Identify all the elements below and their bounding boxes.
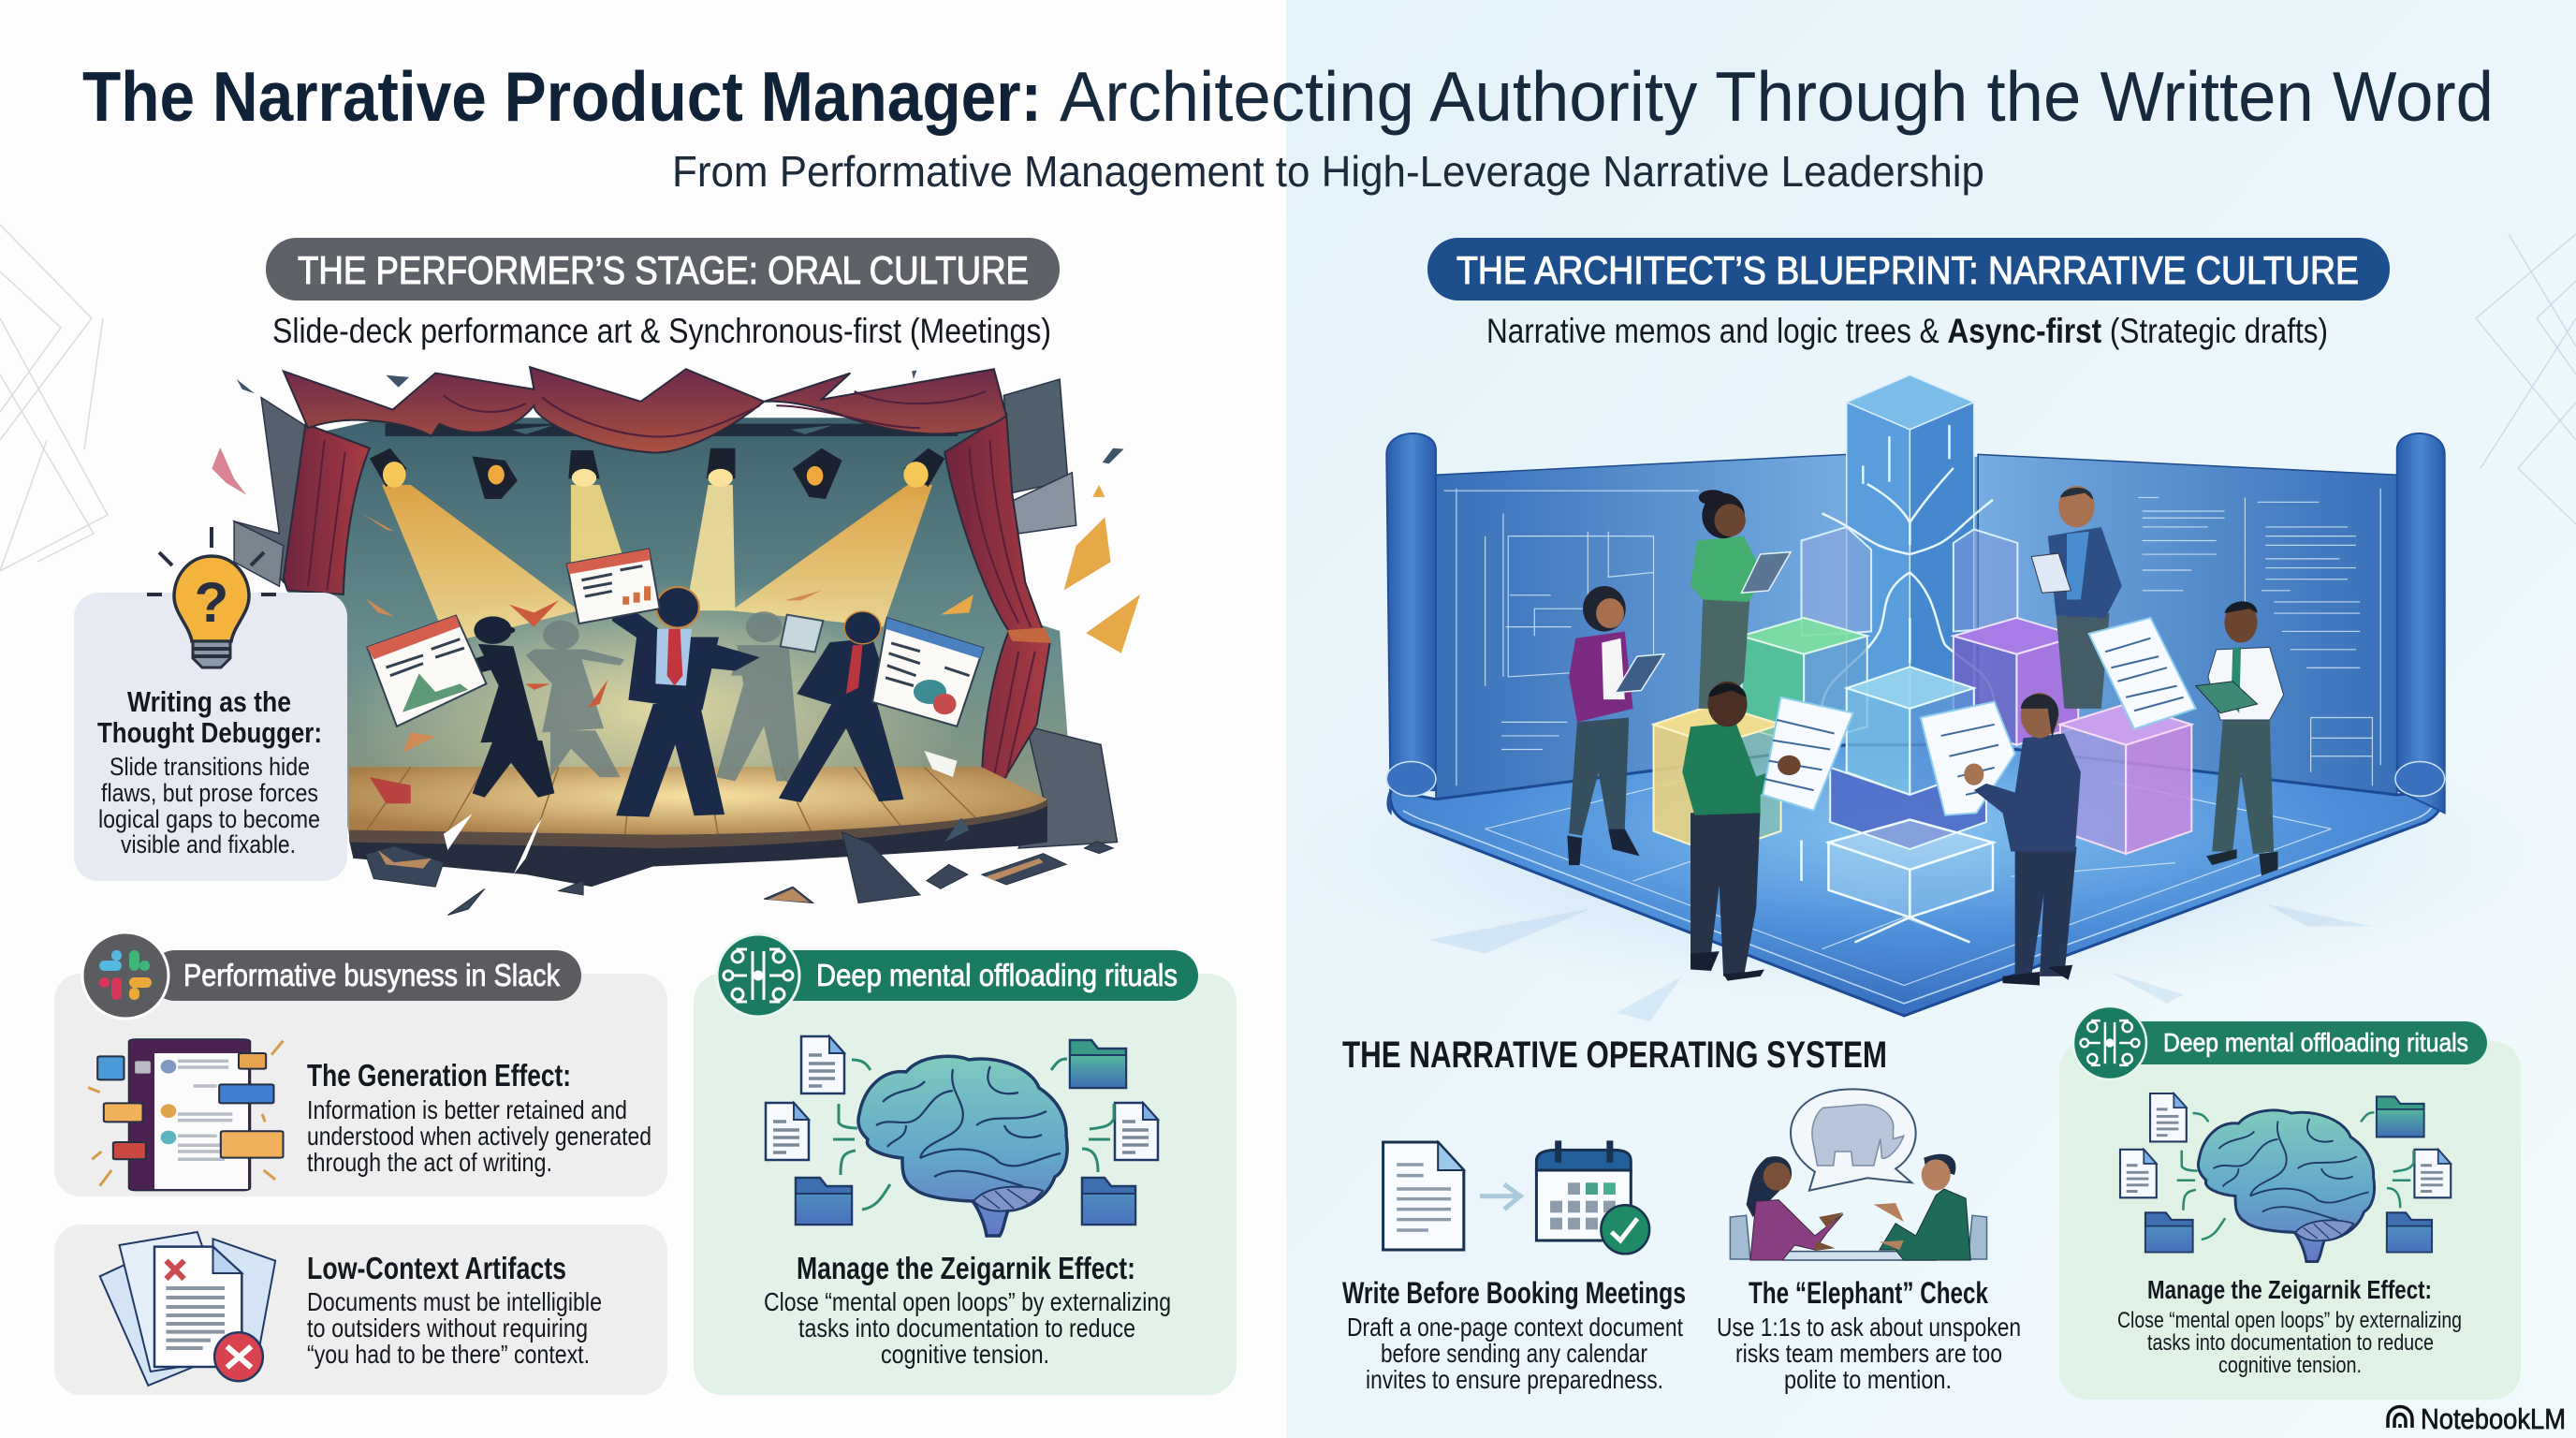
background: right panel (1286, 0, 2576, 1438)
item: write before booking meetings: Write Before Booking Meetings (1342, 1276, 1686, 1310)
panel: the generation effect: through the act of writing. (307, 1148, 552, 1177)
illustration: crumbling theatre stage (212, 367, 1140, 916)
panel: zeigarnik effect (right): Manage the Zeigarnik Effect: (2147, 1275, 2432, 1304)
right curtain (944, 414, 1051, 789)
pill: performative busyness in slack: Performative busyness in Slack (183, 958, 560, 992)
icon: question light bulb: ? (195, 571, 228, 634)
blueprint back wall right (1978, 454, 2397, 800)
floor glow behind performers (345, 579, 970, 838)
callout card (74, 593, 347, 881)
callout: writing as the thought debugger (74, 527, 347, 881)
item: the elephant check: Use 1:1s to ask about unspoken (1717, 1313, 2021, 1342)
blueprint floor (1390, 745, 2443, 1016)
panel: the generation effect: The Generation Effect: (307, 1058, 571, 1093)
callout: writing as the thought debugger: visible and fixable. (121, 830, 296, 858)
truss (386, 425, 957, 435)
pill: deep mental offloading rituals (right): Deep mental offloading rituals (2163, 1028, 2468, 1057)
title: Architecting Authority Through the Written Word (1060, 57, 2494, 136)
item: write before booking meetings: Draft a one-page context document (1347, 1313, 1683, 1342)
icon: slack logo (82, 932, 168, 1019)
blueprint back wall left (1436, 454, 1847, 800)
valance swags (284, 367, 1006, 453)
background: left panel (0, 0, 1286, 1438)
heading pill: performer's stage (266, 238, 1060, 301)
pill: deep mental offloading rituals (right) (2073, 1006, 2487, 1079)
item: the elephant check: The “Elephant” Check (1749, 1276, 1988, 1310)
translucent cube: upper right (1954, 529, 2017, 631)
left curtain (284, 424, 370, 594)
item: the elephant check: polite to mention. (1784, 1365, 1952, 1394)
light beams (382, 485, 932, 643)
callout: writing as the thought debugger: Thought Debugger: (97, 716, 322, 749)
icon: document to calendar (1383, 1140, 1649, 1254)
translucent cube: magenta (2060, 704, 2191, 854)
panel: the generation effect: understood when actively generated (307, 1122, 651, 1151)
icon: brain with documents and folders (766, 1036, 1158, 1236)
panel: zeigarnik effect (right): cognitive tension. (2218, 1353, 2362, 1378)
person: woman with green top and tablet (1690, 490, 1791, 709)
icon: question light bulb (147, 527, 276, 668)
pill: deep mental offloading rituals: Deep mental offloading rituals (816, 958, 1178, 992)
logic tree lines (1822, 425, 1995, 709)
panel: low-context artifacts (54, 1225, 667, 1395)
panel: low-context artifacts: Low-Context Artifacts (307, 1251, 566, 1285)
panel: zeigarnik effect (left): Manage the Zeigarnik Effect: (797, 1251, 1135, 1285)
translucent cube: upper left (1801, 527, 1871, 636)
person: man in green sweater, foreground (1682, 682, 1853, 981)
panel: zeigarnik effect (left): Close “mental open loops” by externalizing (764, 1287, 1171, 1316)
panel: zeigarnik effect (right): Close “mental open loops” by externalizing (2117, 1308, 2462, 1333)
item: the elephant check: risks team members are too (1735, 1339, 2002, 1368)
callout: writing as the thought debugger: logical gaps to become (98, 805, 320, 833)
item: write before booking meetings: before sending any calendar (1381, 1339, 1647, 1368)
translucent cube: yellow (1654, 704, 1781, 854)
heading pill: architect's blueprint (1427, 238, 2390, 301)
stage lights (370, 448, 944, 499)
title: The Narrative Product Manager: (82, 57, 1042, 136)
icon: rejected documents stack (100, 1232, 275, 1386)
translucent cube: purple (1954, 618, 2078, 745)
stage floor (349, 767, 1047, 840)
item: the elephant check (1717, 1089, 2021, 1394)
panel: zeigarnik effect (left): cognitive tension. (881, 1340, 1049, 1369)
illustration: architect's blueprint (1288, 375, 2537, 1021)
slide: small rear tablet (781, 615, 823, 653)
pill: performative busyness in slack (82, 932, 581, 1019)
item: write before booking meetings (1342, 1140, 1686, 1394)
callout: writing as the thought debugger: flaws, but prose forces (101, 779, 318, 807)
person: man in white shirt with memo (2089, 601, 2284, 875)
panel: the generation effect: Information is better retained and (307, 1095, 627, 1124)
panel: low-context artifacts: to outsiders without requiring (307, 1313, 588, 1343)
callout: writing as the thought debugger: Writing as the (127, 685, 291, 718)
performer: right man (779, 611, 903, 802)
ground glow (1288, 709, 2537, 1021)
subtitle: From Performative Management to High-Leverage Narrative Leadership (672, 147, 1984, 196)
translucent cube: green (1741, 618, 1867, 745)
panel: zeigarnik effect (right): tasks into documentation to reduce (2147, 1330, 2434, 1356)
panel: zeigarnik effect (left): tasks into documentation to reduce (798, 1313, 1135, 1343)
flying debris (212, 371, 1140, 916)
stage back wall (284, 416, 1101, 858)
callout: writing as the thought debugger: Slide transitions hide (110, 753, 310, 781)
item: write before booking meetings: invites to ensure preparedness. (1366, 1365, 1663, 1394)
heading pill: performer's stage: THE PERFORMER’S STAGE: ORAL CULTURE (298, 248, 1029, 292)
ghost performers (526, 611, 801, 781)
subheading: oral culture: Slide-deck performance art & Synchronous-first (Meetings) (272, 312, 1051, 350)
translucent cube: front glass (1801, 820, 1993, 942)
panel: low-context artifacts: Documents must be intelligible (307, 1287, 602, 1316)
icon: brain with documents and folders (right) (2120, 1093, 2451, 1262)
icon: chat window with bubbles (88, 1039, 283, 1191)
heading pill: architect's blueprint: THE ARCHITECT’S BLUEPRINT: NARRATIVE CULTURE (1456, 248, 2359, 292)
person: man in dark suit, foreground (1921, 693, 2081, 986)
stage front edge (349, 800, 1047, 887)
central logic tower (1847, 375, 1974, 709)
pill: deep mental offloading rituals (717, 934, 1198, 1017)
subheading: narrative culture: Narrative memos and logic trees & Async-first (Strategic drafts) (1486, 312, 2328, 350)
section heading: the narrative operating system: THE NARRATIVE OPERATING SYSTEM (1342, 1034, 1887, 1076)
icon: two people and elephant in speech bubble (1730, 1089, 1987, 1260)
title (82, 57, 2494, 136)
performer: central man (612, 582, 760, 817)
slide: centre board (567, 549, 660, 624)
slide: right board (872, 618, 983, 726)
slide: left board (367, 615, 487, 726)
panel: low-context artifacts: “you had to be there” context. (307, 1340, 590, 1369)
person: man in blue blazer with paper (2031, 486, 2122, 709)
scroll roll left (1386, 433, 1436, 813)
panel: zeigarnik effect (right) (2059, 1006, 2521, 1400)
performer: left woman (427, 616, 554, 798)
grey broken wall fragments (234, 379, 1118, 848)
panel: zeigarnik effect (left) (694, 934, 1237, 1395)
scroll roll right (2395, 433, 2445, 813)
floor plan line art (1403, 489, 2434, 1004)
blueprint back wall: centre backdrop (1842, 457, 1983, 756)
translucent cube: centre (1830, 667, 1986, 849)
person: woman with purple blazer (1567, 586, 1664, 865)
panel: the generation effect (54, 974, 667, 1196)
